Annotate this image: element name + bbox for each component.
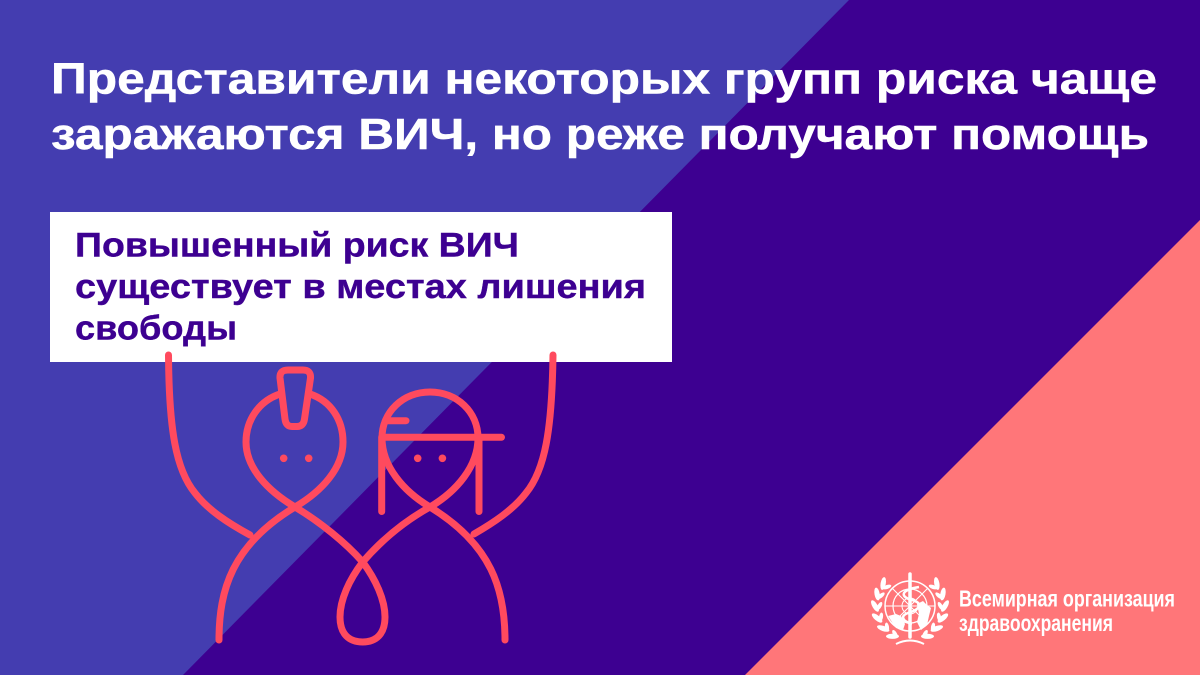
laurel left: [869, 577, 899, 639]
globe: [885, 581, 935, 631]
callout text: существует в местах лишения: [75, 268, 646, 306]
illustration: two people holding the sign: [168, 355, 553, 642]
WHO name: [959, 586, 1175, 636]
title: [51, 54, 1157, 159]
title: заражаются ВИЧ, но реже получают помощь: [51, 110, 1149, 159]
callout: white sign: [50, 212, 672, 362]
hair strands: [382, 437, 479, 512]
fringe: [388, 417, 406, 424]
background: coral corner triangle: [745, 220, 1200, 675]
WHO logo: [869, 574, 1175, 644]
callout text: свободы: [75, 310, 237, 348]
right figure head: [382, 392, 478, 507]
title: Представители некоторых групп риска чаще: [51, 54, 1157, 104]
callout text: Повышенный риск ВИЧ: [75, 226, 519, 264]
left arm: [168, 355, 250, 535]
ribbon, staff and serpent: [896, 574, 924, 644]
continents: [888, 601, 931, 630]
eyes: [280, 454, 446, 462]
callout text: [75, 226, 646, 348]
left figure: head and body strand: [246, 394, 505, 642]
mohawk: [280, 370, 311, 426]
laurel right: [921, 577, 951, 639]
right arm: [474, 355, 553, 534]
headband: [382, 434, 502, 441]
WHO name: здравоохранения: [959, 610, 1113, 636]
right figure: head and body strand: [219, 394, 343, 640]
icon: WHO emblem: [869, 574, 951, 644]
